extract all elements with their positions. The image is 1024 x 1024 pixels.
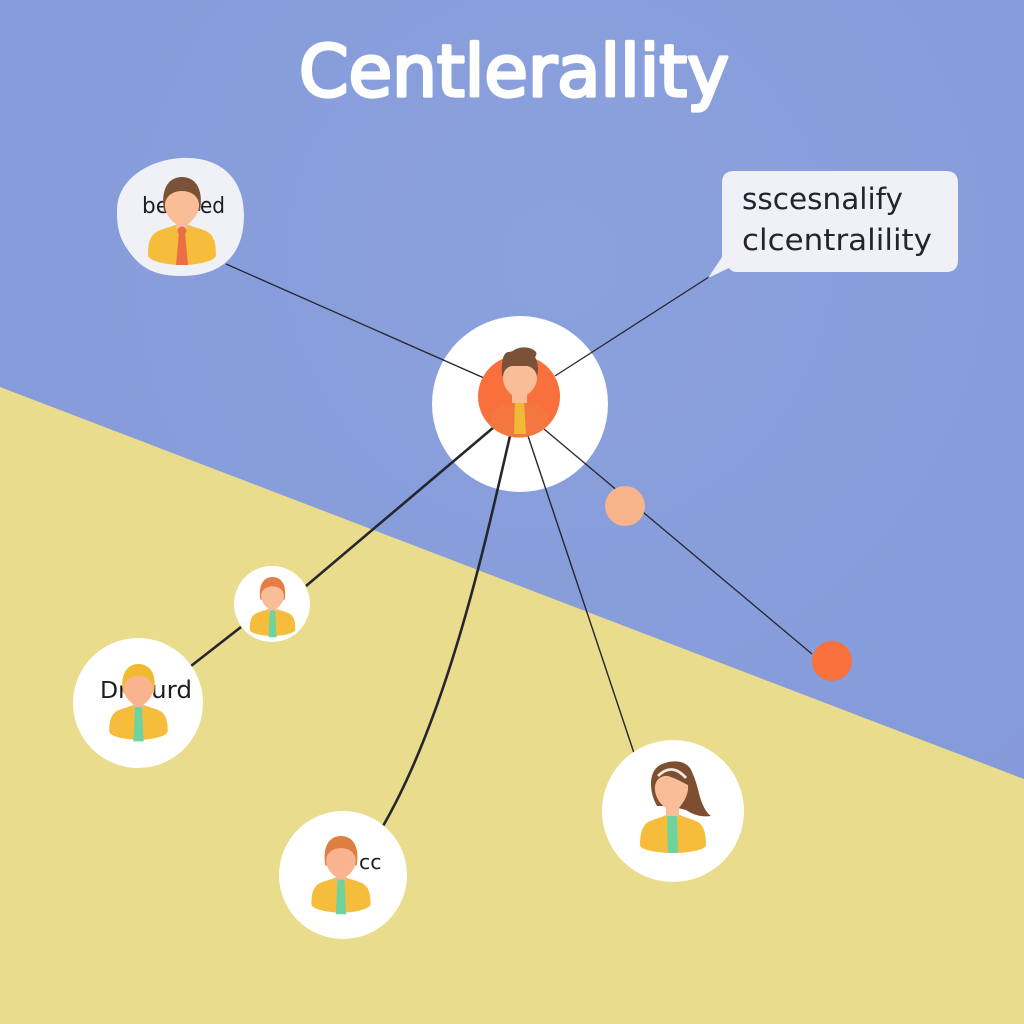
node: Drurd person: urd: [151, 676, 192, 704]
yellow background region: [0, 387, 1024, 1024]
callout: [708, 171, 958, 278]
node: cc person: cc: [359, 850, 382, 874]
callout: sscesnalify: [742, 182, 903, 216]
central person avatar: [478, 347, 560, 440]
node: Drurd person: Dr: [100, 676, 128, 704]
small peach node: [605, 486, 645, 526]
node: Drurd person: [73, 638, 203, 768]
node: top-left person: [117, 158, 244, 276]
connector lines: [191, 264, 812, 826]
node: cc person: [279, 811, 407, 939]
central node halo: [432, 316, 608, 492]
node: top-left person: ed: [200, 194, 225, 219]
small orange node: [812, 641, 852, 681]
title: Centlerallity: [299, 30, 729, 113]
callout: clcentralility: [742, 223, 932, 257]
node: small person: [234, 566, 310, 642]
node: top-left person: be: [142, 194, 169, 219]
node: woman: [602, 740, 744, 882]
